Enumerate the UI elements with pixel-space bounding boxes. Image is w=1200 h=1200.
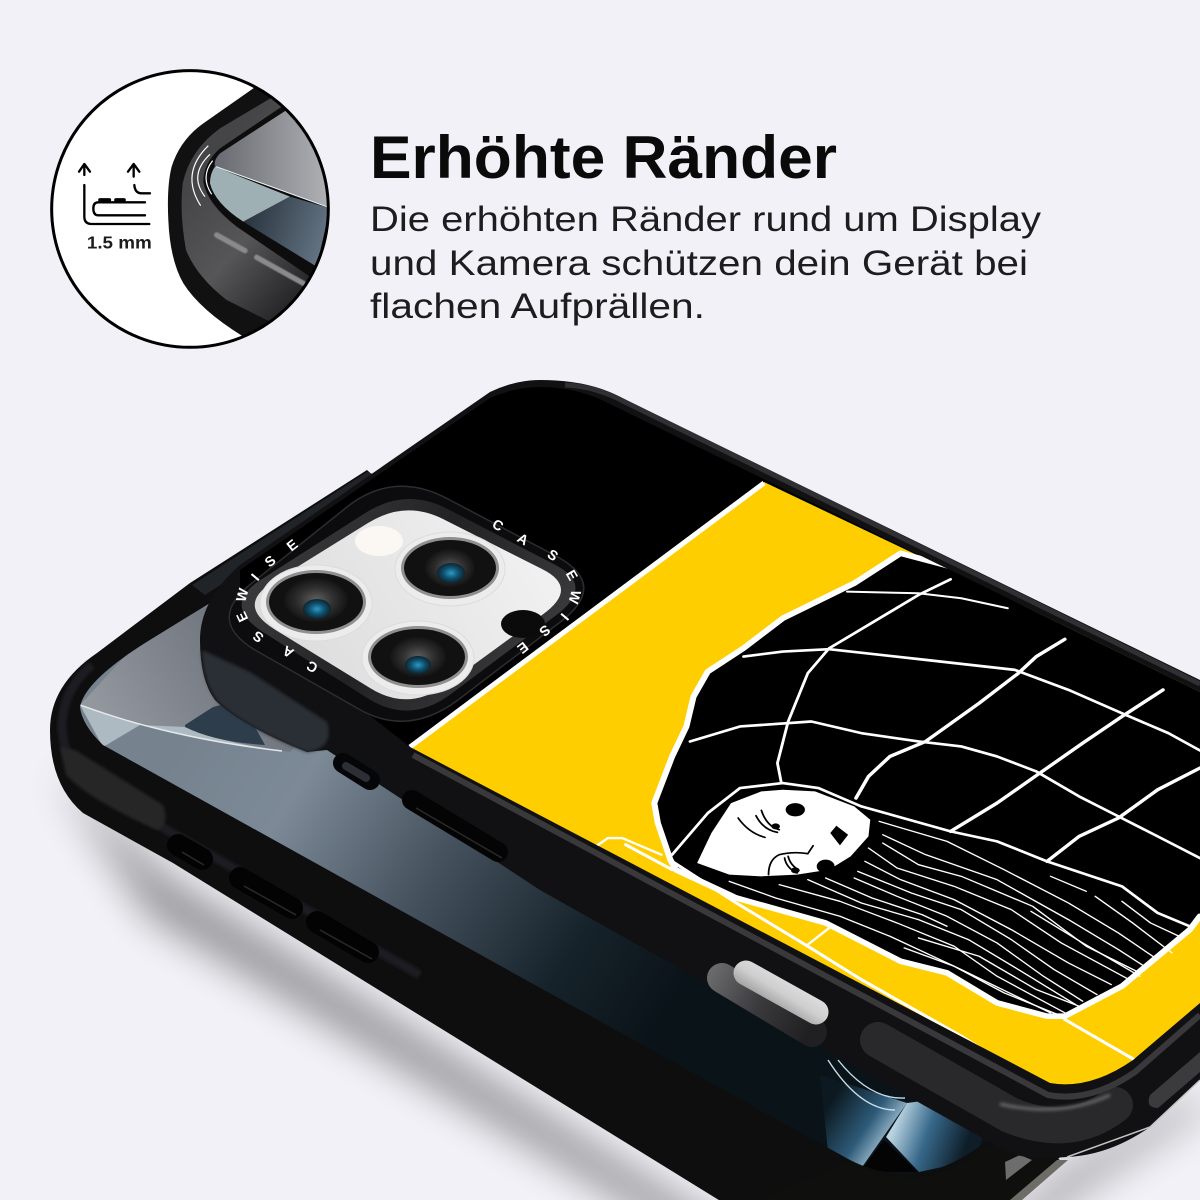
pale reflection [80, 705, 265, 748]
body text: flachen Aufprällen. [370, 287, 705, 326]
left light beam [824, 1083, 907, 1166]
right light beam [886, 1100, 985, 1172]
camera module [229, 486, 584, 721]
ring lettering upper right: W [565, 589, 584, 606]
side highlights [217, 235, 303, 283]
yellow panel [410, 482, 1200, 1100]
silver lower edge [1067, 1080, 1200, 1157]
body text [370, 200, 1042, 326]
body text: Die erhöhten Ränder rund um Display [370, 200, 1042, 239]
ring lettering upper right: I [558, 610, 572, 624]
ring lettering lower left [233, 536, 320, 676]
rim highlight [62, 665, 420, 975]
white highlight curve [80, 705, 282, 751]
raised edge icon [79, 164, 150, 224]
ring lettering upper right [490, 516, 584, 657]
translucent camera-corner bumper [202, 650, 329, 752]
ring lettering upper right: E [514, 639, 532, 657]
body text: und Kamera schützen dein Gerät bei [370, 244, 1028, 283]
icon: phone profile [93, 202, 145, 215]
ring lettering lower left: S [261, 552, 279, 570]
ring lettering lower left: E [233, 609, 251, 625]
lens top right [395, 532, 505, 606]
hair strands [729, 821, 1179, 1015]
upper glass [214, 111, 327, 206]
drop shadow under phones [55, 770, 1200, 1200]
black panel [240, 387, 920, 747]
inset outline [52, 71, 328, 347]
speaker grille [1149, 1052, 1200, 1108]
bottom-right carbon bumper [878, 1040, 1115, 1125]
button: action [178, 845, 204, 865]
ring lettering lower left: W [233, 586, 252, 603]
hair and hat [654, 553, 1200, 1016]
icon: edge profile [84, 185, 149, 224]
floor lines [596, 836, 1136, 1060]
port metal [746, 973, 816, 1012]
icon: right arrow [128, 164, 139, 177]
illustration: woman with long hair [594, 553, 1200, 1093]
inner black rim [203, 107, 327, 276]
microphone cutout [501, 610, 545, 638]
ring lettering upper right: S [536, 622, 554, 640]
case artwork [190, 370, 1200, 1100]
back phone frame [50, 470, 1100, 1200]
silent switch [343, 763, 370, 780]
icon: left arrow [79, 164, 90, 175]
rim highlight [413, 755, 1200, 1097]
side port on back phone [1005, 1155, 1032, 1180]
lower right rim of back phone [735, 1130, 1060, 1200]
front phone frame [200, 380, 1200, 1158]
corner lit side [182, 98, 309, 321]
screen glass [80, 600, 1000, 1174]
title: Erhöhte Ränder [370, 124, 837, 191]
black triangle [860, 1140, 918, 1172]
charging port [722, 973, 816, 1032]
camera inner bevel [242, 499, 575, 711]
glass reflections [80, 560, 985, 1172]
thickness label: 1.5 mm [87, 232, 152, 252]
light beam curves [828, 1060, 905, 1110]
dark glass [243, 197, 330, 267]
corner body [168, 88, 292, 336]
flash [355, 526, 403, 556]
bottom-left carbon bumper [60, 747, 165, 830]
ring lettering upper right: S [545, 546, 561, 564]
ring lettering upper right: C [490, 516, 506, 534]
back phone case [50, 470, 1100, 1200]
camera window [255, 510, 561, 699]
ring lettering upper right: A [515, 530, 531, 548]
net lines [672, 579, 1200, 926]
detail inset circle [52, 60, 340, 360]
upper rim edge [565, 385, 1200, 684]
translucent right edge of back phone [1010, 1160, 1068, 1200]
ring lettering lower left: E [283, 536, 301, 554]
facial lines [738, 810, 813, 875]
facial features [771, 803, 848, 873]
face [697, 790, 870, 876]
lens bottom [362, 621, 474, 695]
impact arcs [192, 146, 213, 206]
inset white disc [52, 71, 328, 347]
ring lettering lower left: A [280, 643, 296, 661]
upper grey reflection [80, 606, 294, 752]
icon: camera lip [134, 185, 150, 193]
button: volume down [317, 922, 372, 959]
camera outer ring [229, 486, 584, 721]
button: volume up [240, 878, 296, 915]
ring lettering lower left: S [250, 628, 266, 646]
volume button front [412, 800, 502, 858]
icon: camera bumps [100, 194, 124, 205]
ring lettering lower left: C [304, 658, 320, 676]
pale glass [210, 167, 290, 222]
upper rim tint [192, 472, 385, 595]
white divider [410, 483, 764, 747]
port housing [722, 978, 812, 1032]
ring lettering lower left: I [248, 570, 262, 584]
rim shine [1000, 1095, 1110, 1109]
lens left [260, 565, 372, 641]
white reflection line [216, 167, 328, 207]
front phone case [200, 380, 1200, 1158]
ring lettering upper right: E [563, 567, 581, 583]
dark tile [185, 705, 265, 745]
inset phone corner [168, 88, 327, 336]
